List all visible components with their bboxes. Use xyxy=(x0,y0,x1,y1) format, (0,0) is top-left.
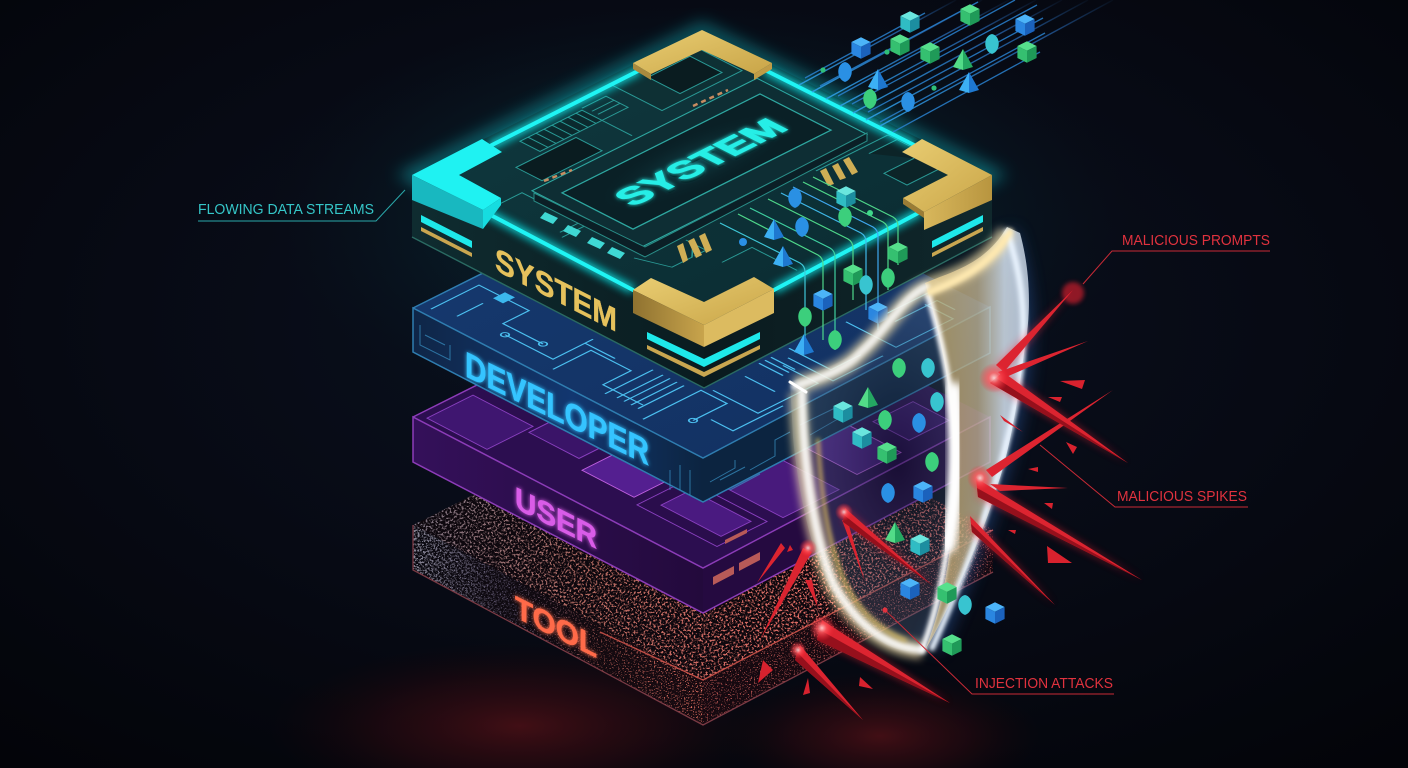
corner: gold bottom xyxy=(633,277,774,347)
spikes xyxy=(757,290,1142,720)
corner: cyan xyxy=(412,139,502,229)
chip front edges xyxy=(534,133,867,257)
cubes escaping shield xyxy=(900,578,1005,656)
side stripes xyxy=(421,215,983,377)
spike dark facets xyxy=(795,378,1142,720)
developer side circuitry xyxy=(420,325,850,495)
callout: malicious prompts xyxy=(1083,233,1270,284)
cyan glowing edges xyxy=(485,70,920,290)
layer: developer xyxy=(413,163,990,502)
shield xyxy=(790,227,1029,651)
callout: malicious spikes: MALICIOUS SPIKES xyxy=(1117,489,1247,505)
chip base xyxy=(532,78,867,247)
callout: flowing data streams: FLOWING DATA STREAMS xyxy=(198,202,374,218)
flares xyxy=(789,282,1084,659)
user circuit panels xyxy=(427,286,963,560)
spike glow xyxy=(817,290,1142,703)
layer: tool (dissolving slab) xyxy=(413,380,993,725)
label: SYSTEM on side: SYSTEM xyxy=(495,241,617,340)
shield rim highlights xyxy=(790,232,1023,650)
small cyan pads xyxy=(540,212,625,259)
label: DEVELOPER: DEVELOPER xyxy=(465,345,649,474)
shield right bevel xyxy=(925,227,1029,650)
cubes inside shield xyxy=(833,358,944,556)
callout: injection attacks: INJECTION ATTACKS xyxy=(975,676,1113,692)
layer: system xyxy=(412,30,992,388)
callout: flowing data streams xyxy=(198,190,405,221)
system top circuitry xyxy=(432,39,979,315)
corner: gold top xyxy=(633,30,772,80)
layer: user xyxy=(413,272,990,613)
user side chips xyxy=(713,529,760,585)
red spikes xyxy=(757,282,1142,720)
shards xyxy=(758,380,1085,695)
data streams: incoming upper right xyxy=(799,0,1113,132)
corner: gold right xyxy=(902,139,992,230)
callout: malicious prompts: MALICIOUS PROMPTS xyxy=(1122,233,1270,249)
label: USER: USER xyxy=(515,480,597,556)
shield glass xyxy=(790,227,1029,651)
system bus bars xyxy=(677,157,858,263)
developer circuit traces xyxy=(429,173,973,448)
callout: injection attacks xyxy=(882,607,1114,694)
label: SYSTEM on top: SYSTEM xyxy=(604,114,797,211)
slab glow xyxy=(412,30,992,322)
data streams: descending through system xyxy=(720,177,908,355)
label: TOOL: TOOL xyxy=(515,589,597,665)
shield outer glow xyxy=(795,232,1007,650)
orange dashes xyxy=(544,90,728,181)
shield back halo xyxy=(932,232,1023,648)
label: SYSTEM on top: SYSTEM xyxy=(605,118,798,215)
callout: malicious spikes xyxy=(1040,445,1248,507)
